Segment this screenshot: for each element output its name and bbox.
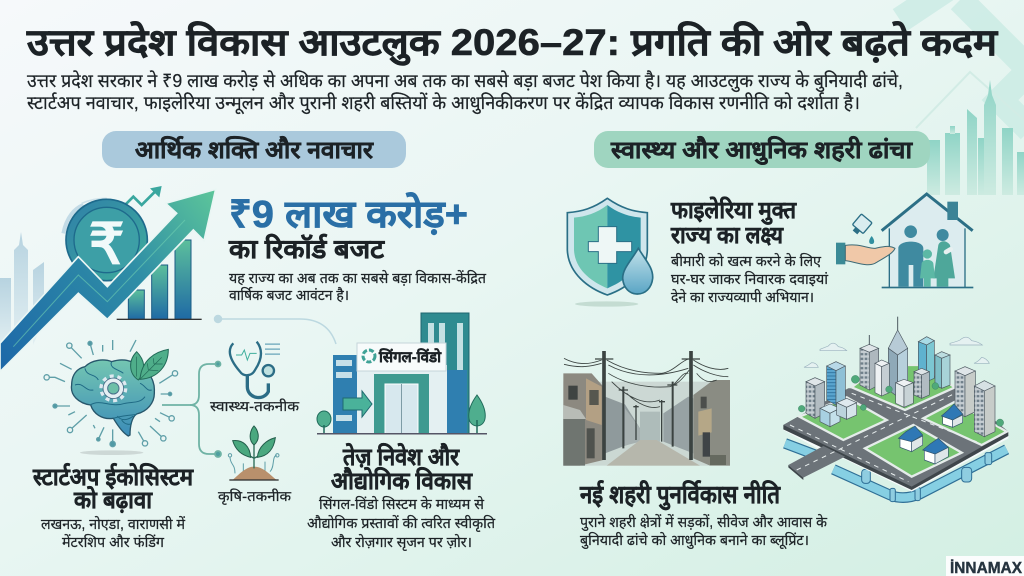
investment description: सिंगल-विंडो सिस्टम के माध्यम से [319,495,484,513]
startup description: मेंटरशिप और फंडिंग [62,533,165,551]
startup description [41,516,185,551]
budget description: वार्षिक बजट आवंटन है। [229,287,349,304]
background skyline: top right [900,0,1024,195]
urban policy description [580,514,828,549]
section heading: economy [102,131,406,168]
illustration: old urban street [563,351,730,466]
investment heading: औद्योगिक विकास [331,467,473,495]
background skyline: left [0,232,44,348]
filariasis description: बीमारी को खत्म करने के लिए [671,253,822,270]
intro paragraph [27,70,903,115]
budget description [229,270,487,304]
startup description: लखनऊ, नोएडा, वाराणसी में [41,516,185,533]
budget headline: ₹9 लाख करोड़+ [229,192,468,236]
slab and road grid [783,425,1008,492]
intro paragraph: उत्तर प्रदेश सरकार ने ₹9 लाख करोड़ से अधिक का अपना अब तक का सबसे बड़ा बजट पेश किया है। यह आउटलुक राज्य के बुनियादी ढांचे, [27,70,903,92]
pipeline [785,443,1007,498]
icon: plant sprout [228,426,279,481]
startup heading: स्टार्टअप ईकोसिस्टम [32,463,195,491]
icon: stethoscope [230,342,280,398]
title: उत्तर प्रदेश विकास आउटलुक 2026–27: प्रगति की ओर बढ़ते कदम [26,21,999,66]
section heading: health [594,131,930,168]
filariasis heading: फाइलेरिया मुक्त [670,196,797,225]
connector: budget to single window [214,316,336,344]
icon: growth chart with rupee coin and arrow: ₹ [89,213,125,276]
filariasis heading [670,196,797,248]
intro paragraph: स्टार्टअप नवाचार, फाइलेरिया उन्मूलन और पुरानी शहरी बस्तियों के आधुनिकीकरण पर केंद्रित व्यापक विकास रणनीति को दर्शाता है। [27,92,860,115]
clouds [804,337,989,367]
illustration: modern isometric city [783,317,1008,502]
icon: growth chart with rupee coin and arrow [0,186,216,372]
investment heading [331,443,473,495]
icon: health shield with drop [567,198,653,307]
startup heading: को बढ़ावा [73,486,153,514]
filariasis description: घर-घर जाकर निवारक दवाइयां [671,271,828,288]
label: health tech: स्वास्थ्य-तकनीक [210,398,299,414]
icon: hand, medicine and family in house [836,194,973,288]
connector lines: startup to sectors [162,362,221,457]
startup heading [32,463,195,514]
icon: single-window building: सिंगल-विंडो [378,348,442,366]
section heading: economy: आर्थिक शक्ति और नवाचार [135,136,374,164]
urban policy description: बुनियादी ढांचे को आधुनिक बनाने का ब्लूप्रिंट। [580,531,809,549]
budget headline: का रिकॉर्ड बजट [228,233,386,264]
filariasis description: देने का राज्यव्यापी अभियान। [671,289,814,306]
filariasis description [671,253,828,306]
urban policy heading: नई शहरी पुनर्विकास नीति [579,480,782,511]
investment description: और रोज़गार सृजन पर ज़ोर। [331,534,472,551]
investment heading: तेज़ निवेश और [342,443,460,471]
urban policy description: पुराने शहरी क्षेत्रों में सड़कों, सीवेज और आवास के [580,514,828,531]
investment description [307,495,496,551]
icon: single-window building [317,313,487,434]
buildings [806,317,995,437]
budget description: यह राज्य का अब तक का सबसे बड़ा विकास-केंद्रित [229,270,487,287]
label: agri tech: कृषि-तकनीक [218,488,291,505]
investment description: औद्योगिक प्रस्तावों की त्वरित स्वीकृति [307,515,496,532]
trees [798,375,1004,426]
icon: brain with leaf and gear [44,340,178,455]
budget headline [228,192,468,264]
houses [898,404,963,464]
filariasis heading: राज्य का लक्ष्य [670,222,784,248]
section heading: health: स्वास्थ्य और आधुनिक शहरी ढांचा [610,136,913,165]
